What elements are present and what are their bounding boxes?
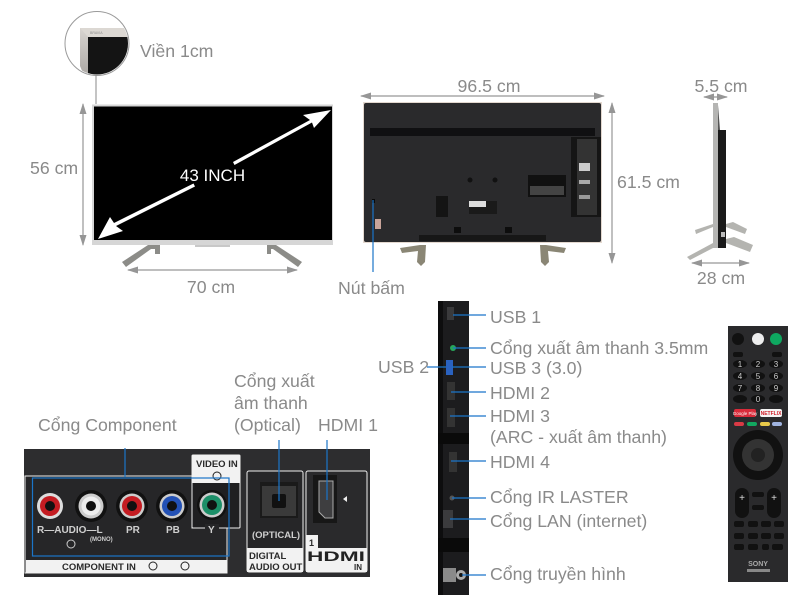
height label, front: 56 cm — [30, 158, 78, 178]
rear view of TV — [363, 102, 602, 266]
optical group: (OPTICAL) — [252, 530, 300, 541]
remote control: 6 — [774, 372, 779, 381]
HDMI 1 label: HDMI 1 — [318, 415, 378, 435]
optical label — [234, 371, 315, 435]
rear connector panel close-up — [24, 449, 370, 577]
bezel zoom inset: BRAVIA — [90, 31, 103, 35]
optical group: AUDIO OUT — [249, 562, 302, 573]
remote control: + — [739, 493, 745, 504]
remote control: 7 — [738, 384, 743, 393]
port labels: HDMI 3 — [490, 406, 550, 426]
port labels: Cổng IR LASTER — [490, 487, 629, 507]
width arrow, rear — [361, 95, 604, 97]
remote control: 8 — [756, 384, 761, 393]
base label: 28 cm — [697, 268, 745, 288]
width label, rear: 96.5 cm — [458, 76, 520, 96]
port labels: USB 1 — [490, 307, 541, 327]
remote control: SONY — [748, 561, 768, 568]
optical label: (Optical) — [234, 415, 301, 435]
base arrow — [692, 262, 749, 264]
side connector strip — [438, 301, 469, 595]
port labels: HDMI 4 — [490, 452, 550, 472]
optical pointer — [278, 440, 280, 501]
port labels — [378, 307, 708, 584]
height arrow, rear — [611, 103, 613, 263]
component group: COMPONENT IN — [62, 562, 136, 573]
remote control: + — [771, 493, 777, 504]
port labels: HDMI 2 — [490, 383, 550, 403]
HDMI group: HDMI — [307, 548, 365, 564]
button pointer — [372, 200, 374, 272]
port pointers — [427, 315, 486, 575]
optical label: âm thanh — [234, 393, 308, 413]
remote control: NETFLIX — [761, 411, 782, 417]
HDMI group: 1 — [309, 538, 314, 548]
width label, front: 70 cm — [187, 277, 235, 297]
depth arrow — [704, 96, 727, 98]
component group: R—AUDIO—L — [37, 525, 103, 536]
depth label: 5.5 cm — [694, 76, 748, 96]
remote control — [728, 326, 788, 582]
remote control: 5 — [756, 372, 761, 381]
component group: VIDEO IN — [196, 459, 238, 470]
HDMI 1 pointer — [326, 440, 328, 500]
width arrow, front — [128, 269, 297, 271]
port labels: (ARC - xuất âm thanh) — [490, 427, 667, 447]
port labels: USB 3 (3.0) — [490, 358, 582, 378]
remote control: 2 — [756, 360, 761, 369]
component group: PB — [166, 525, 180, 536]
component label: Cổng Component — [38, 415, 177, 435]
height arrow, front — [82, 104, 84, 245]
optical group — [247, 471, 303, 573]
remote control: 0 — [756, 395, 761, 404]
component group: PR — [126, 525, 141, 536]
component group: Y — [208, 525, 215, 536]
remote control: 4 — [738, 372, 743, 381]
front view of TV: 43 INCH — [180, 166, 245, 185]
component outline and pointer — [32, 448, 229, 556]
component group — [25, 455, 240, 573]
optical group: DIGITAL — [249, 551, 286, 562]
diagonal size arrow — [98, 110, 331, 239]
button label: Nút bấm — [338, 278, 405, 298]
remote control: 1 — [738, 360, 743, 369]
remote control: 9 — [774, 384, 779, 393]
height label, rear: 61.5 cm — [617, 172, 680, 192]
bezel zoom inset — [65, 12, 134, 104]
port labels: Cổng xuất âm thanh 3.5mm — [490, 338, 708, 358]
port labels: Cổng truyền hình — [490, 564, 626, 584]
component group: (MONO) — [90, 537, 113, 543]
side view of TV — [687, 103, 753, 260]
bezel label: Viền 1cm — [140, 41, 213, 61]
HDMI group — [306, 471, 367, 572]
remote control: Google Play — [733, 411, 758, 416]
optical label: Cổng xuất — [234, 371, 315, 391]
remote control: 3 — [774, 360, 779, 369]
front view of TV — [92, 104, 333, 267]
port labels: Cổng LAN (internet) — [490, 511, 647, 531]
HDMI group: IN — [354, 563, 362, 572]
port labels: USB 2 — [378, 357, 429, 377]
